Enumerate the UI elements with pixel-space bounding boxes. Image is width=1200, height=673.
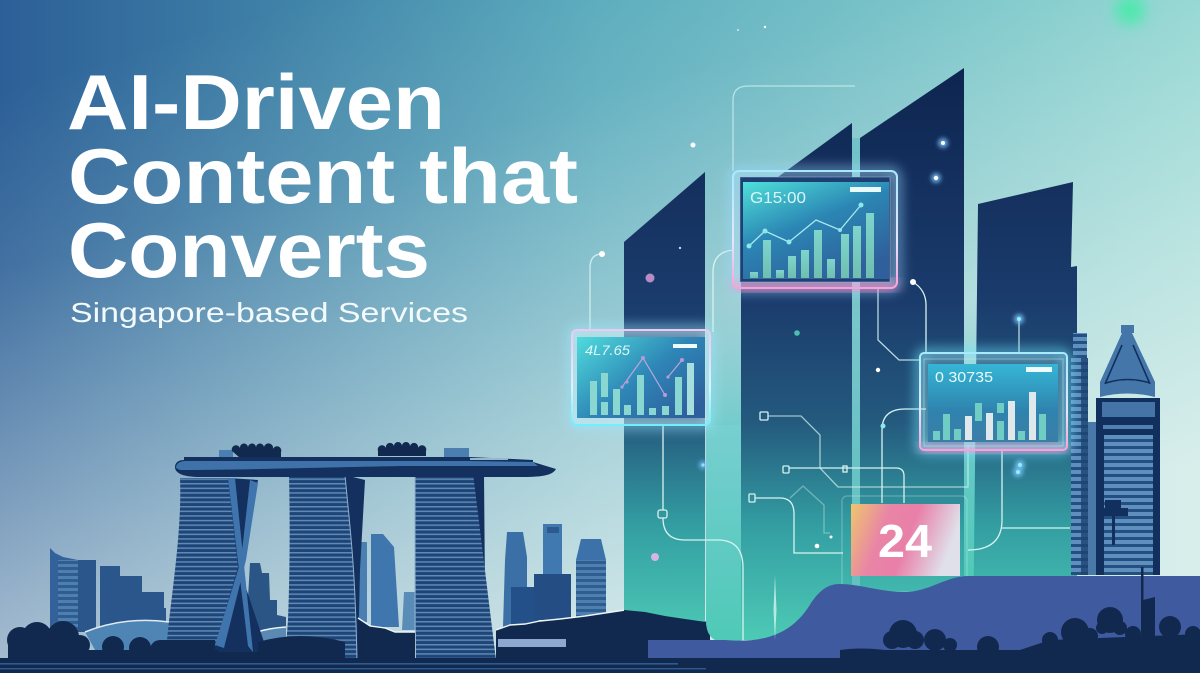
Marina Bay Sands hotel	[167, 442, 556, 662]
title: Content that	[68, 132, 578, 220]
trees right silhouette	[840, 567, 1200, 673]
glowing node dots	[599, 26, 1025, 561]
top chart panel: G15:00	[750, 190, 806, 207]
tower two	[285, 475, 365, 662]
teal underlay	[706, 300, 1072, 642]
glowing skyscrapers	[624, 68, 1077, 642]
tower B	[741, 123, 852, 640]
tower three	[415, 473, 496, 660]
title	[67, 58, 578, 294]
title: Converts	[68, 206, 430, 294]
tower C	[860, 68, 964, 640]
green glow orb	[1115, 0, 1145, 25]
far skyline right	[503, 524, 606, 627]
left chart panel: 4L7.65	[585, 342, 630, 358]
left chart panel	[572, 330, 710, 425]
tower A	[624, 172, 705, 640]
white sparkle line	[774, 575, 776, 640]
subtitle: Singapore-based Services	[70, 297, 468, 328]
trees left	[7, 621, 345, 660]
top chart panel	[733, 171, 897, 290]
skypark deck	[175, 442, 556, 477]
foreground bottom strip	[0, 658, 1200, 673]
right striped tower	[1071, 333, 1096, 575]
far skyline left	[50, 548, 166, 632]
re-drawn roof edge near teal strip	[624, 610, 706, 660]
number tile 24: 24	[878, 515, 932, 567]
right chart panel	[920, 353, 1067, 452]
dome and low roofs	[85, 620, 286, 650]
right landmark tower	[1096, 325, 1160, 575]
circuit lines	[590, 86, 1070, 642]
title: AI-Driven	[67, 58, 445, 146]
tower one	[167, 478, 270, 660]
teal strip	[706, 425, 741, 642]
gap strip	[852, 138, 860, 620]
number tile 24	[851, 504, 960, 576]
right chart panel: 0 30735	[935, 369, 993, 386]
tower D	[973, 182, 1077, 640]
low stepped roof buildings	[358, 610, 710, 662]
blue ground wave	[648, 576, 1200, 673]
far skyline centre	[245, 534, 416, 650]
